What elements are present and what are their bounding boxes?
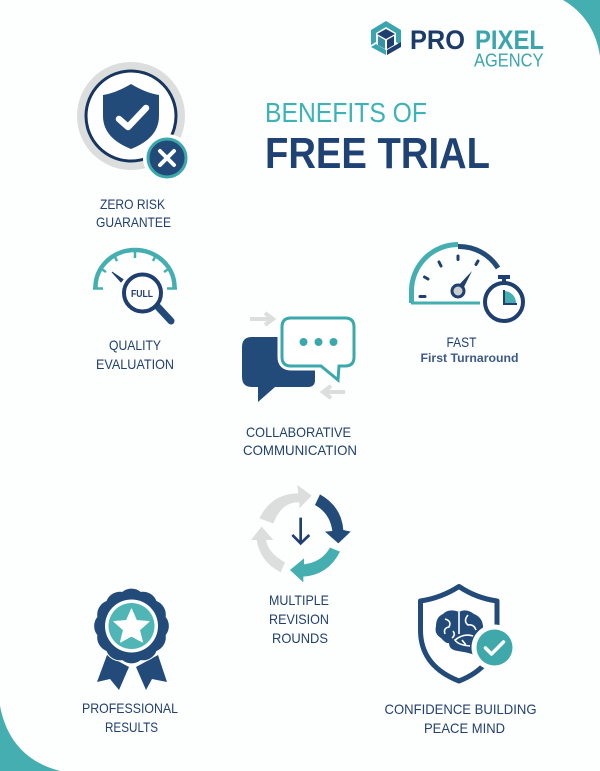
benefit: collaborative communication bbox=[242, 313, 357, 458]
label: ZERO RISK bbox=[100, 196, 166, 212]
icon: logo cube bbox=[371, 21, 401, 55]
icon: speedometer with stopwatch bbox=[411, 244, 523, 321]
label: REVISION bbox=[269, 611, 329, 627]
icon: shield with brain and check bbox=[420, 586, 518, 681]
label: ROUNDS bbox=[272, 630, 328, 646]
title bbox=[265, 97, 490, 178]
benefit: quality evaluation bbox=[93, 250, 177, 372]
benefit: zero risk guarantee bbox=[81, 66, 191, 230]
benefit: fast first turnaround bbox=[411, 244, 523, 365]
benefit: professional results bbox=[82, 589, 178, 735]
heading line: Benefits of: BENEFITS OF bbox=[265, 97, 427, 128]
label: COLLABORATIVE bbox=[246, 424, 351, 440]
icon: circular arrows bbox=[251, 485, 351, 582]
icon: gauge with magnifier: FULL bbox=[131, 289, 153, 300]
label: CONFIDENCE BUILDING bbox=[384, 701, 536, 717]
icon: award rosette bbox=[94, 589, 169, 690]
label: EVALUATION bbox=[96, 356, 174, 372]
label: QUALITY bbox=[109, 337, 162, 353]
logo wordmark PIXEL: PIXEL bbox=[475, 25, 544, 55]
label: RESULTS bbox=[105, 719, 158, 735]
logo bbox=[371, 21, 544, 70]
benefit: confidence building peace mind bbox=[384, 586, 536, 736]
sublabel: First Turnaround bbox=[420, 351, 518, 365]
icon: shield in ring with x badge bbox=[81, 66, 191, 182]
label: GUARANTEE bbox=[96, 214, 171, 230]
corner accent: top right bbox=[563, 0, 600, 56]
heading line: Free Trial: FREE TRIAL bbox=[265, 129, 490, 178]
label: PROFESSIONAL bbox=[82, 700, 178, 716]
logo wordmark PRO: PRO bbox=[410, 25, 465, 55]
label: PEACE MIND bbox=[424, 720, 505, 736]
logo wordmark AGENCY: AGENCY bbox=[474, 50, 544, 70]
icon: chat bubbles bbox=[242, 313, 354, 402]
corner accent: bottom left bbox=[0, 706, 60, 771]
label: FAST bbox=[446, 334, 477, 350]
label: MULTIPLE bbox=[269, 592, 329, 608]
benefit: multiple revision rounds bbox=[251, 485, 351, 646]
label: COMMUNICATION bbox=[243, 442, 357, 458]
